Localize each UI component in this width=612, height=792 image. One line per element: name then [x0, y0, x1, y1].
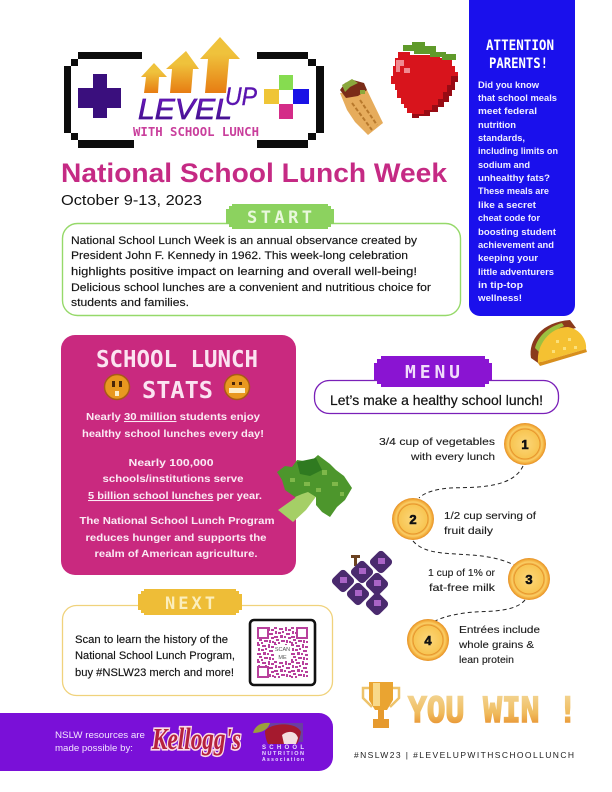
- text block: intro text: Delicious school lunches are a convenient and nutritious choice for: [71, 282, 431, 294]
- text block: intro text: highlights positive impact on learning and overall well-being!: [71, 266, 417, 278]
- text block: parents message: [477, 80, 558, 304]
- qr code: SCAN: [275, 647, 290, 653]
- menu item: fruit: fruit daily: [444, 525, 494, 537]
- coin 1: [504, 423, 546, 465]
- menu item: entrees: [458, 624, 540, 666]
- coin 2: 2: [409, 512, 417, 527]
- text block: intro text: National School Lunch Week is an annual observance created by: [71, 235, 418, 247]
- panel: menu box: [314, 380, 558, 414]
- text block: parents message: little adventurers: [478, 267, 554, 278]
- stat: 5 billion lunches: [88, 457, 262, 502]
- coin 4: [407, 619, 449, 661]
- qr code: ME: [278, 655, 287, 661]
- coin 1: 1: [521, 437, 529, 452]
- you win text: YOU WIN !: [408, 691, 577, 731]
- text: sponsor note: made possible by:: [55, 743, 133, 754]
- text block: parents message: sodium and: [478, 160, 530, 171]
- qr code: [250, 620, 315, 685]
- coin 4: 4: [424, 633, 432, 648]
- text block: scan instructions: [75, 634, 235, 679]
- panel: next: [62, 606, 332, 696]
- text block: parents message: unhealthy fats?: [478, 173, 550, 184]
- stat: 5 billion lunches: 5 billion school lunches per year.: [88, 490, 262, 502]
- text block: parents message: wellness!: [477, 293, 522, 304]
- text block: intro text: students and families.: [71, 297, 189, 309]
- stat: 30 million students: healthy school lunches every day!: [82, 428, 264, 440]
- logo: School Nutrition Association: [253, 723, 304, 763]
- stat: program mission: realm of American agriculture.: [94, 548, 258, 560]
- text block: parents message: meet federal: [478, 106, 537, 117]
- stat: program mission: [80, 515, 274, 560]
- icon: grapes: [330, 549, 394, 617]
- logo: coloured buttons: [264, 75, 309, 119]
- logo: game controller brackets: [64, 52, 324, 148]
- icon: strawberry: [391, 42, 458, 118]
- text block: parents message: that school meals: [478, 93, 557, 104]
- heading: attention parents: PARENTS!: [489, 56, 548, 72]
- coin 3: 3: [525, 572, 533, 587]
- text block: parents message: in tip-top: [478, 280, 523, 291]
- text: sponsor note: NSLW resources are: [55, 730, 145, 741]
- text block: parents message: keeping your: [478, 253, 538, 264]
- menu item: entrees: Entrées include: [459, 624, 540, 636]
- title: National School Lunch Week: [61, 158, 448, 188]
- hashtags: #NSLW23 | #LEVELUPWITHSCHOOLLUNCH: [354, 750, 574, 760]
- text block: parents message: nutrition: [478, 120, 516, 131]
- stat: program mission: The National School Lunch Program: [80, 515, 274, 527]
- menu item: fruit: 1/2 cup serving of: [444, 510, 536, 522]
- text block: parents message: boosting student: [478, 227, 557, 238]
- text block: parents message: Did you know: [478, 80, 540, 91]
- text block: parents message: achievement and: [478, 240, 554, 251]
- heading: school lunch: SCHOOL LUNCH: [96, 347, 258, 373]
- logo: with school lunch: WITH SCHOOL LUNCH: [133, 125, 259, 139]
- next pill: [138, 589, 242, 615]
- coin 2: [392, 498, 434, 540]
- stat: program mission: reduces hunger and supports the: [86, 532, 267, 544]
- icon: surprised face: [104, 374, 130, 400]
- text block: intro text: President John F. Kennedy in 1962. This week-long celebration: [71, 250, 408, 262]
- panel: intro: [62, 224, 460, 316]
- panel: sponsors: [0, 713, 333, 771]
- icon: taco: [531, 320, 587, 366]
- logo: purple d-pad: [78, 74, 121, 118]
- text block: intro text: [71, 235, 431, 309]
- logo: School Nutrition Association: Association: [262, 757, 304, 763]
- dashed path linking coins: [413, 466, 525, 621]
- menu item: milk: 1 cup of 1% or: [428, 567, 495, 579]
- icon: broccoli: [277, 455, 352, 522]
- menu item: vegetables: 3/4 cup of vegetables: [379, 436, 495, 448]
- logo: Level Up with School Lunch: [64, 37, 324, 148]
- text: sponsor note: [55, 730, 145, 754]
- menu pill: [374, 356, 492, 387]
- logo: rising arrows: [141, 37, 240, 93]
- heading: stats: STATS: [142, 378, 213, 404]
- text block: parents message: like a secret: [478, 200, 537, 211]
- heading: attention parents: ATTENTION: [486, 38, 554, 54]
- text: menu tagline: Let’s make a healthy school lunch!: [330, 392, 543, 408]
- stat: 30 million students: [82, 411, 264, 440]
- logo: School Nutrition Association: SCHOOL: [262, 745, 304, 751]
- menu item: entrees: whole grains &: [458, 639, 534, 651]
- panel: attention parents: [469, 0, 575, 316]
- icon: grinning face: [224, 374, 250, 400]
- icon: trophy: [363, 682, 399, 728]
- start pill: START: [247, 208, 312, 228]
- next pill: NEXT: [165, 594, 215, 614]
- stat: 5 billion lunches: Nearly 100,000: [128, 457, 214, 469]
- coin 3: [508, 558, 550, 600]
- menu item: milk: fat-free milk: [429, 582, 496, 594]
- stat: 5 billion lunches: schools/institutions serve: [102, 473, 244, 485]
- text block: scan instructions: Scan to learn the history of the: [75, 634, 228, 646]
- menu item: entrees: lean protein: [459, 654, 514, 666]
- menu item: vegetables: [379, 436, 495, 463]
- logo: LEVEL word: LEVEL: [138, 94, 232, 126]
- text block: parents message: standards,: [478, 133, 525, 144]
- text block: parents message: including limits on: [478, 146, 558, 157]
- logo: UP word: UP: [225, 83, 257, 111]
- stat: 30 million students: Nearly 30 million students enjoy: [86, 411, 260, 423]
- text block: scan instructions: National School Lunch Program,: [75, 650, 235, 662]
- logo: Kellogg's: Kellogg's: [151, 721, 241, 756]
- start pill: [226, 204, 334, 229]
- logo: School Nutrition Association: NUTRITION: [262, 751, 304, 757]
- text block: parents message: cheat code for: [478, 213, 540, 224]
- menu item: vegetables: with every lunch: [410, 451, 495, 463]
- menu pill: MENU: [405, 362, 460, 383]
- date: October 9-13, 2023: [61, 192, 202, 209]
- text block: parents message: These meals are: [478, 186, 549, 197]
- menu item: milk: [428, 567, 496, 594]
- heading: attention parents: [486, 38, 554, 72]
- menu item: fruit: [444, 510, 536, 537]
- panel: school lunch stats: [61, 335, 296, 575]
- icon: burrito: [340, 79, 383, 135]
- text block: scan instructions: buy #NSLW23 merch and more!: [75, 667, 234, 679]
